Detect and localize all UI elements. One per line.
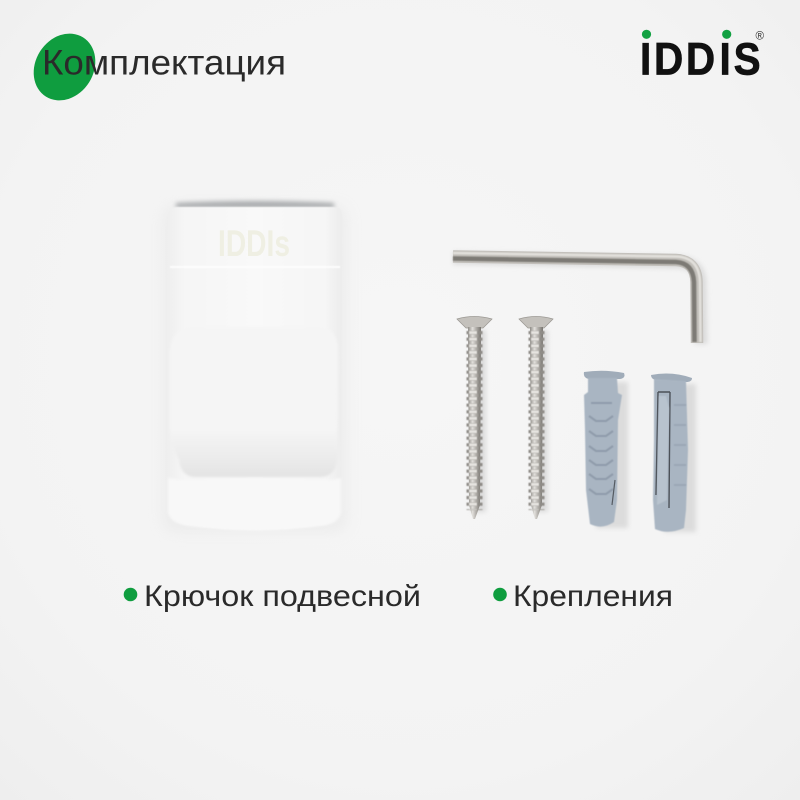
anchor 2 shadow — [664, 384, 696, 532]
label: Крючок подвесной — [124, 580, 421, 613]
screw 2 shadow — [534, 330, 548, 512]
logo dots — [642, 30, 731, 39]
hook recessed pad — [170, 327, 338, 477]
hook logo: IDDIs — [218, 223, 290, 264]
logo: IDDIS — [640, 30, 764, 85]
hex key dark facet — [453, 258, 694, 342]
bullet — [124, 588, 137, 601]
screw 2 — [519, 316, 553, 519]
hook top edge — [176, 201, 334, 208]
registered mark: ® — [756, 30, 764, 42]
hex key highlight — [453, 253, 700, 342]
screw 1 shadow — [472, 330, 486, 512]
green blob — [21, 22, 108, 112]
anchor 1 flange — [584, 371, 624, 379]
heading text: Комплектация — [42, 42, 286, 82]
wall anchor 1 — [584, 371, 628, 528]
label text: Крепления — [513, 580, 673, 613]
screw 1 threads — [466, 331, 482, 510]
label text: Крючок подвесной — [144, 580, 421, 613]
screw 1 shaft — [468, 327, 481, 519]
screw 2 thread highlight — [531, 331, 539, 510]
anchor 2 flange — [651, 374, 692, 382]
screw 1 — [457, 316, 492, 519]
hex key shadow — [453, 258, 701, 344]
screw 2 head — [519, 316, 553, 328]
heading: Комплектация with green blob — [21, 22, 286, 112]
hex key steel — [453, 256, 697, 343]
product: white hanging hook — [162, 201, 348, 533]
logo wordmark: IDDIS — [640, 35, 761, 85]
hook collar line — [170, 266, 340, 268]
anchor 1 body — [584, 378, 622, 527]
anchor 2 slit — [656, 392, 670, 508]
hook lower lip — [168, 478, 341, 530]
anchor 1 slit — [612, 480, 615, 505]
anchor 2 tongue — [657, 396, 669, 505]
wall anchor 2 — [651, 374, 696, 532]
screw 2 shaft — [530, 327, 543, 519]
anchor 2 body — [653, 379, 688, 532]
hex key — [453, 253, 701, 344]
anchor 1 shadow — [596, 382, 628, 528]
screw 1 head — [457, 316, 492, 328]
bullet — [493, 588, 507, 601]
label: Крепления — [493, 580, 673, 613]
hook shadow — [162, 205, 348, 533]
hook body — [168, 207, 342, 530]
screw 1 thread highlight — [469, 331, 477, 510]
screw 2 threads — [528, 331, 544, 510]
anchor 2 ribs — [674, 405, 686, 485]
anchor 1 ribs — [589, 403, 613, 494]
